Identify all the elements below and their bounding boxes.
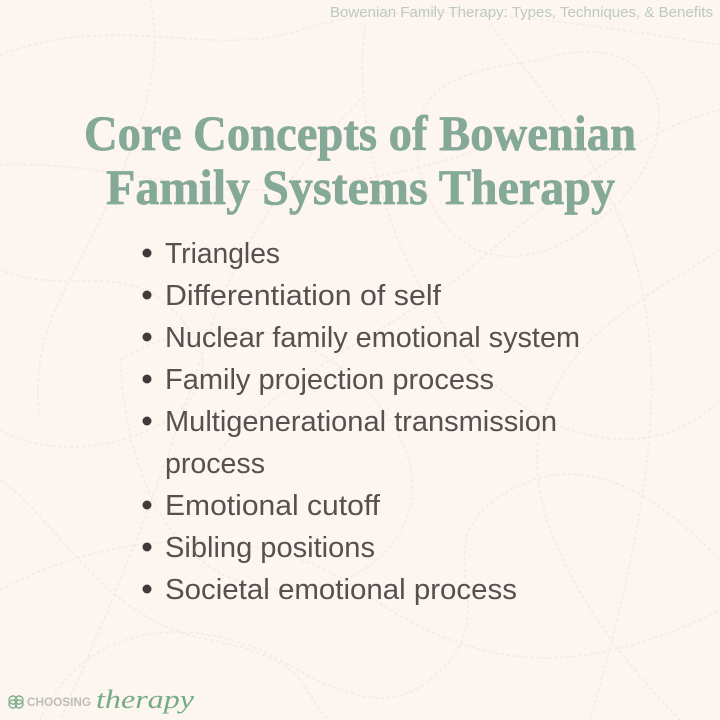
item: Triangles: Triangles [165, 238, 280, 270]
item: Societal emotional process: Societal emotional process [165, 574, 517, 606]
item: Multigenerational transmission process: process [165, 448, 265, 480]
title [84, 105, 636, 215]
bullet list [142, 238, 580, 606]
item: Multigenerational transmission process: Multigenerational transmission [165, 406, 557, 438]
item: Family projection process: Family projection process [165, 364, 494, 396]
logo [9, 685, 195, 714]
title: Core Concepts of Bowenian [84, 105, 636, 161]
item: Sibling positions: Sibling positions [165, 532, 375, 564]
logo word: choosing: CHOOSING [27, 697, 91, 709]
logo word: therapy: therapy [96, 685, 195, 714]
item: Differentiation of self: Differentiation of self [165, 280, 442, 312]
item: Nuclear family emotional system: Nuclear family emotional system [165, 322, 580, 354]
title: Family Systems Therapy [106, 159, 615, 215]
item: Multigenerational transmission process [142, 406, 557, 480]
icon: logo mark [9, 696, 23, 708]
item: Emotional cutoff: Emotional cutoff [165, 490, 381, 522]
source caption: Bowenian Family Therapy: Types, Techniques, & Benefits [330, 5, 713, 21]
